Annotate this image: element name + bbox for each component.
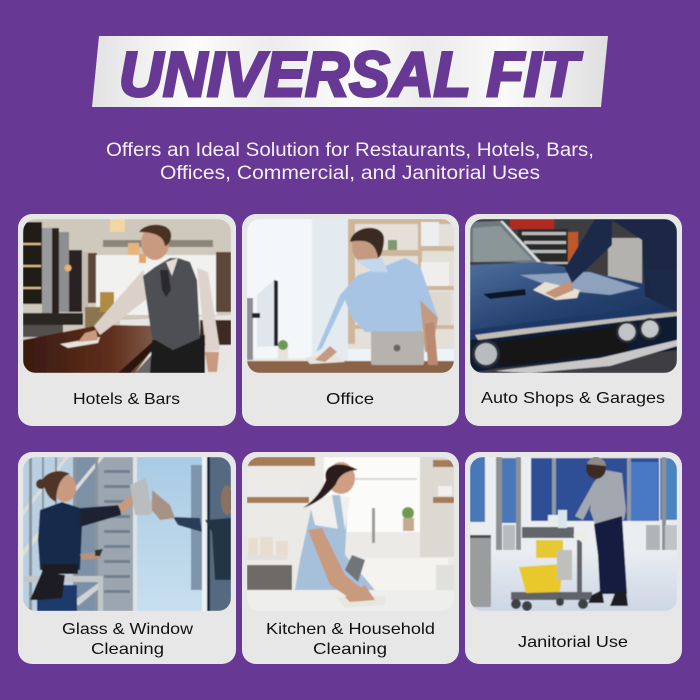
title banner: UNIVERSAL FIT	[119, 40, 582, 110]
label	[266, 621, 435, 658]
panel: glass and window cleaning	[18, 452, 236, 664]
label: Cleaning	[313, 641, 387, 658]
label: Janitorial Use	[518, 634, 628, 651]
label: Cleaning	[91, 641, 164, 658]
panel: hotels and bars	[18, 214, 236, 426]
label: Office	[326, 391, 374, 408]
photo: janitor with cart	[470, 457, 677, 611]
subtitle: Offers an Ideal Solution for Restaurants, Hotels, Bars,	[106, 140, 594, 161]
photo: waiter wiping bar	[23, 219, 231, 373]
photo: woman cleaning kitchen counter	[247, 457, 454, 611]
label: Hotels & Bars	[73, 391, 180, 408]
subtitle	[106, 140, 594, 184]
panel: janitorial use	[465, 452, 682, 664]
panel: auto shops and garages	[465, 214, 682, 426]
panel: office	[242, 214, 459, 426]
label: Kitchen & Household	[266, 621, 435, 638]
photo: wiping classic car hood	[470, 219, 677, 373]
photo: woman cleaning window	[23, 457, 233, 611]
panel: kitchen and household cleaning	[242, 452, 459, 664]
subtitle: Offices, Commercial, and Janitorial Uses	[160, 163, 540, 184]
label: Auto Shops & Garages	[481, 390, 665, 407]
photo: man wiping desk	[247, 219, 454, 373]
label: Glass & Window	[62, 621, 193, 638]
label	[62, 621, 193, 658]
